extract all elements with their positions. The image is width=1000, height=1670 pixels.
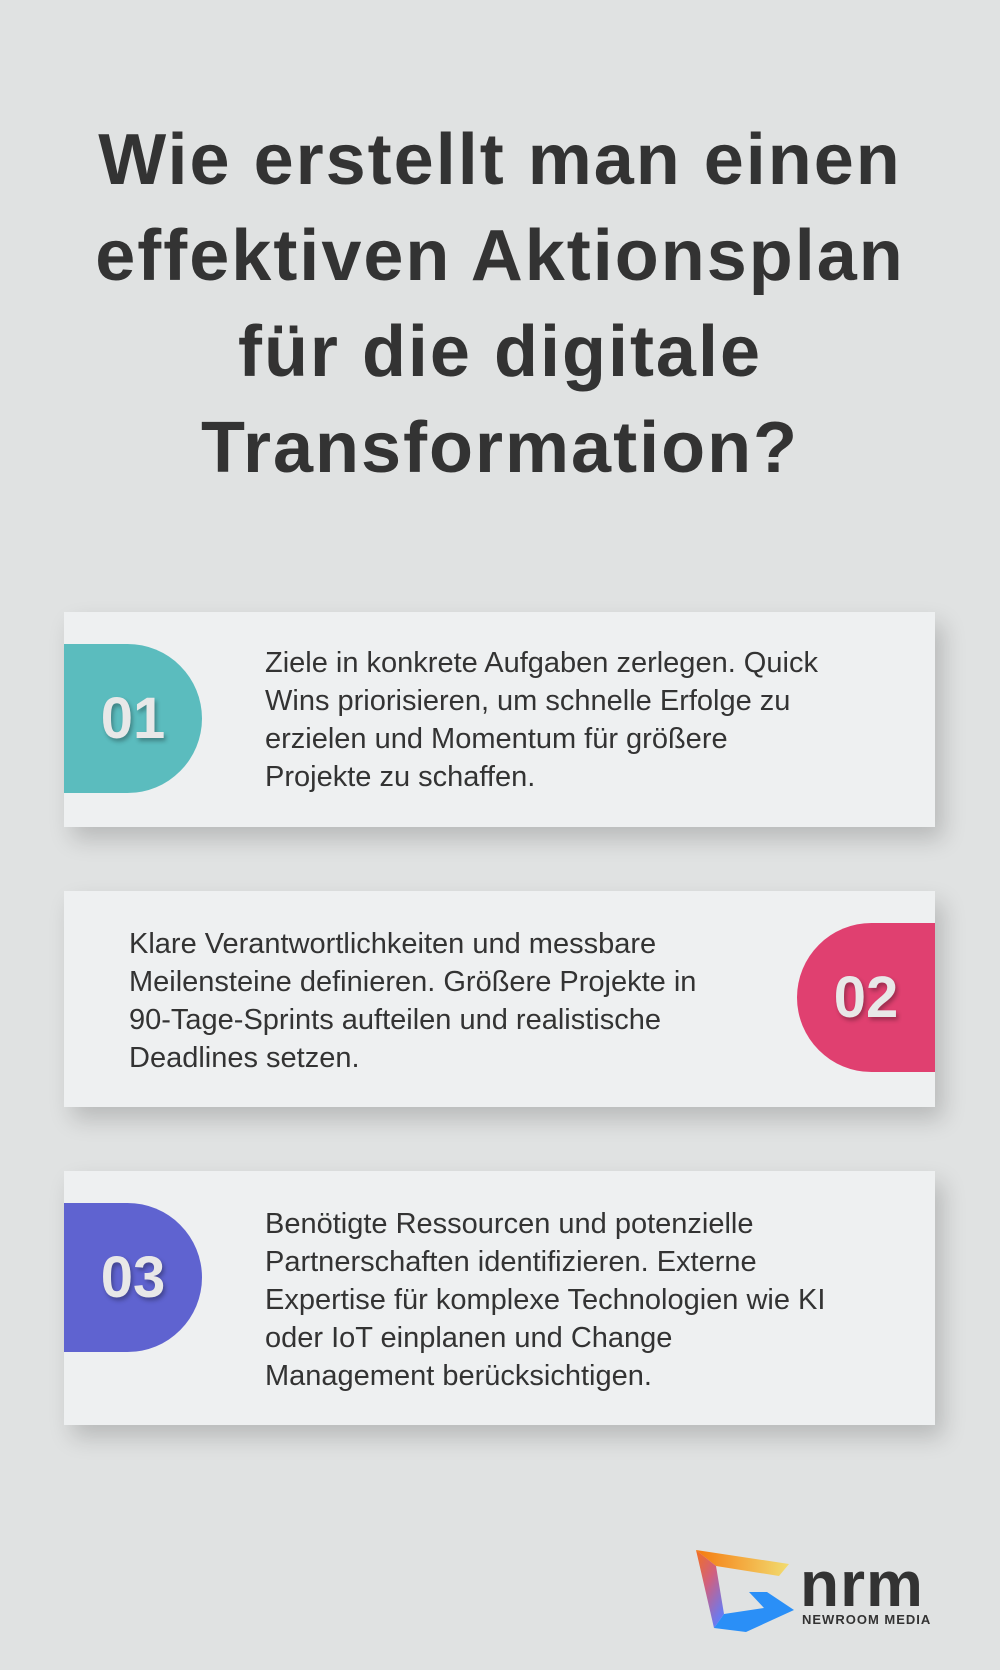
text 2: Meilensteine definieren. Größere Projekte in bbox=[129, 966, 696, 998]
title: für die digitale bbox=[238, 312, 762, 392]
badge 03 bbox=[64, 1203, 202, 1352]
badge 02: 02 bbox=[834, 965, 898, 1030]
text 3: Partnerschaften identifizieren. Externe bbox=[265, 1246, 757, 1278]
text 1: Projekte zu schaffen. bbox=[265, 761, 535, 793]
card 2 bbox=[64, 891, 935, 1107]
icon: logo mark bbox=[696, 1550, 794, 1632]
text 3: oder IoT einplanen und Change bbox=[265, 1322, 672, 1354]
text 2: 90-Tage-Sprints aufteilen und realistische bbox=[129, 1004, 661, 1036]
text 2: Klare Verantwortlichkeiten und messbare bbox=[129, 928, 656, 960]
badge 01: 01 bbox=[101, 686, 165, 751]
title: Transformation? bbox=[201, 408, 799, 488]
text 1: erzielen und Momentum für größere bbox=[265, 723, 728, 755]
badge 02 bbox=[797, 923, 935, 1072]
brand name: nrm bbox=[800, 1548, 924, 1620]
badge 03: 03 bbox=[101, 1245, 165, 1310]
text 3: Management berücksichtigen. bbox=[265, 1360, 652, 1392]
text 1: Wins priorisieren, um schnelle Erfolge zu bbox=[265, 685, 790, 717]
card 1 bbox=[64, 612, 935, 827]
badge 01 bbox=[64, 644, 202, 793]
text 2: Deadlines setzen. bbox=[129, 1042, 360, 1074]
text 1: Ziele in konkrete Aufgaben zerlegen. Quick bbox=[265, 647, 818, 679]
text 2 bbox=[129, 928, 696, 1074]
card 3 bbox=[64, 1171, 935, 1425]
logo bbox=[696, 1548, 931, 1632]
title: effektiven Aktionsplan bbox=[95, 216, 905, 296]
text 3 bbox=[265, 1208, 825, 1392]
text 3: Expertise für komplexe Technologien wie KI bbox=[265, 1284, 825, 1316]
text 1 bbox=[265, 647, 818, 793]
title bbox=[95, 120, 905, 488]
brand subtitle: NEWROOM MEDIA bbox=[802, 1612, 931, 1627]
title: Wie erstellt man einen bbox=[98, 120, 902, 200]
text 3: Benötigte Ressourcen und potenzielle bbox=[265, 1208, 754, 1240]
